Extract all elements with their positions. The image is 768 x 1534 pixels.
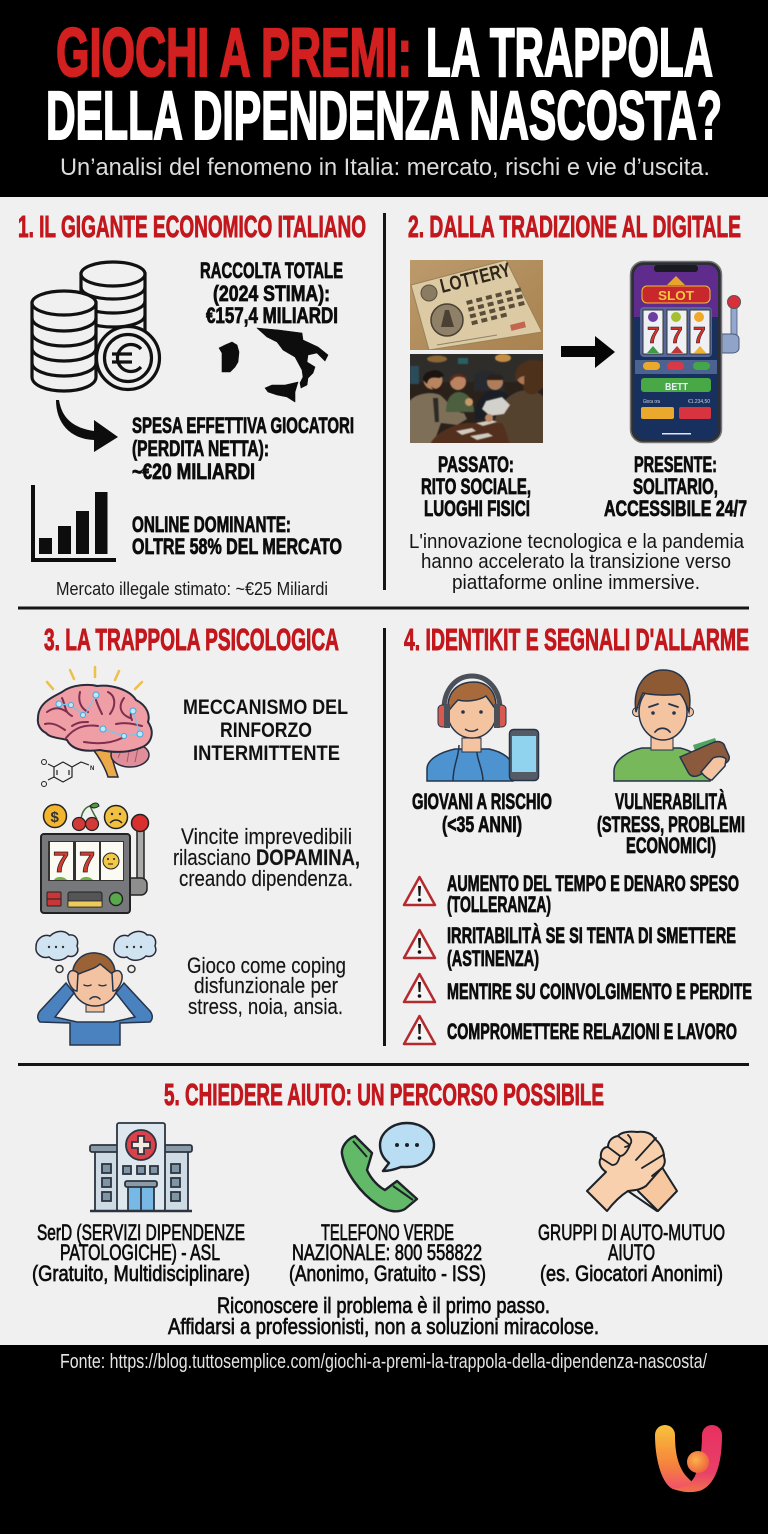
panel 5: chiedere aiuto	[32, 1078, 725, 1339]
paragraph: transition: piattaforme online immersive.	[452, 572, 700, 594]
icon: smartphone slot app	[630, 262, 740, 442]
raccolta totale text: (2024 STIMA):	[213, 281, 330, 306]
online dominante text: OLTRE 58% DEL MERCATO	[132, 534, 342, 559]
service text: telefono verde: (Anonimo, Gratuito - ISS)	[289, 1261, 486, 1286]
icon: young man with headphones and phone	[427, 676, 538, 781]
service text: telefono verde	[289, 1220, 486, 1286]
presente label: SOLITARIO,	[633, 474, 718, 499]
service text: telefono verde: TELEFONO VERDE	[321, 1220, 454, 1245]
spesa effettiva text: ~€20 MILIARDI	[132, 459, 255, 484]
icon: brain with dopamine molecule	[38, 667, 152, 786]
spesa effettiva text	[132, 413, 354, 484]
paragraph: transition: hanno accelerato la transizione verso	[421, 551, 731, 573]
service text: gruppi di auto-mutuo aiuto	[538, 1220, 725, 1286]
paragraph: transition: L'innovazione tecnologica e la pandemia	[409, 531, 745, 553]
presente label: PRESENTE:	[634, 452, 717, 477]
service text: gruppi di auto-mutuo aiuto: (es. Giocatori Anonimi)	[540, 1261, 723, 1286]
panel 4: identikit e segnali d'allarme	[404, 623, 752, 1044]
warning 1	[404, 871, 739, 917]
icon: smartphone slot app: Gioca ora	[643, 399, 660, 405]
icon: slot machine: $	[50, 809, 60, 826]
icon: smartphone slot app: €1.234,50	[688, 399, 710, 405]
profile labels	[412, 789, 745, 858]
online dominante text: ONLINE DOMINANTE:	[132, 512, 291, 537]
icon: smartphone slot app: 7	[670, 322, 683, 348]
subtitle: Un’analisi del fenomeno in Italia: mercato, rischi e vie d’uscita.	[60, 154, 710, 181]
spesa effettiva text: (PERDITA NETTA):	[132, 436, 269, 461]
closing message: Riconoscere il problema è il primo passo.	[217, 1293, 550, 1318]
mechanism text	[183, 695, 348, 765]
arrow: past to present	[561, 336, 615, 368]
online dominante text	[132, 512, 342, 559]
coping text: stress, noia, ansia.	[188, 994, 343, 1019]
logo	[655, 1425, 722, 1492]
coping text: Gioco come coping	[187, 953, 346, 978]
profile labels: (<35 ANNI)	[442, 812, 522, 837]
icon: smartphone slot app: 7	[647, 322, 660, 348]
panel 3: la trappola psicologica	[36, 623, 360, 1045]
paragraph: transition	[409, 531, 745, 594]
passato label	[421, 452, 531, 521]
warning signs list	[404, 871, 752, 1044]
service text: SerD: PATOLOGICHE) - ASL	[60, 1240, 220, 1265]
icon: hospital	[90, 1123, 192, 1211]
dopamine text: rilasciano DOPAMINA,	[173, 845, 360, 870]
raccolta totale text	[200, 258, 343, 328]
spesa effettiva text: SPESA EFFETTIVA GIOCATORI	[132, 413, 354, 438]
heading 3: 3. LA TRAPPOLA PSICOLOGICA	[44, 623, 339, 657]
icon: stressed person	[36, 931, 156, 1045]
passato label: PASSATO:	[438, 452, 514, 477]
dopamine text: creando dipendenza.	[179, 866, 353, 891]
coping text	[187, 953, 346, 1019]
icon: brain with dopamine molecule: N	[90, 766, 94, 772]
arrow: curved to net spending	[56, 400, 118, 452]
image: lottery ticket: LOTTERY	[438, 259, 514, 298]
presente label	[604, 452, 747, 521]
icon: slot machine	[41, 803, 148, 913]
service text: telefono verde: NAZIONALE: 800 558822	[292, 1240, 482, 1265]
icon: phone with speech bubble	[342, 1123, 434, 1211]
icon: smartphone slot app: SLOT	[658, 288, 694, 303]
icon: bar chart	[31, 485, 116, 562]
icon: smartphone slot app: BETT	[665, 382, 688, 393]
warning 1: (TOLLERANZA)	[447, 892, 551, 917]
passato label: RITO SOCIALE,	[421, 474, 531, 499]
service text: SerD: (Gratuito, Multidisciplinare)	[32, 1261, 250, 1286]
profile labels: GIOVANI A RISCHIO	[412, 789, 552, 814]
icon: coin stacks with euro	[32, 262, 160, 391]
image: lottery ticket	[410, 259, 543, 350]
illegal market note: Mercato illegale stimato: ~€25 Miliardi	[56, 579, 328, 599]
service text: SerD: SerD (SERVIZI DIPENDENZE	[37, 1220, 245, 1245]
panel 1: il gigante economico italiano	[18, 210, 366, 599]
warning 2	[404, 923, 736, 971]
icon: clasped hands	[587, 1132, 677, 1211]
icon: slot machine: 7	[79, 847, 95, 879]
dopamine text	[173, 824, 360, 891]
icon: map of southern Italy	[219, 328, 328, 402]
heading 1: 1. IL GIGANTE ECONOMICO ITALIANO	[18, 210, 366, 244]
closing message: Affidarsi a professionisti, non a soluzioni miracolose.	[168, 1314, 599, 1339]
warning 2: (ASTINENZA)	[447, 946, 539, 971]
coping text: disfunzionale per	[194, 973, 338, 998]
mechanism text: RINFORZO	[220, 718, 312, 742]
mechanism text: INTERMITTENTE	[193, 741, 340, 765]
panel 2: dalla tradizione al digitale	[408, 210, 747, 594]
dopamine text: Vincite imprevedibili	[181, 824, 352, 849]
title line 1, red part: GIOCHI A PREMI:	[56, 14, 412, 91]
raccolta totale text: €157,4 MILIARDI	[206, 303, 338, 328]
mechanism text: MECCANISMO DEL	[183, 695, 348, 719]
service text: gruppi di auto-mutuo aiuto: AIUTO	[608, 1240, 655, 1265]
icon: slot machine: 7	[53, 847, 69, 879]
raccolta totale text: RACCOLTA TOTALE	[200, 258, 343, 283]
service text: SerD	[32, 1220, 250, 1286]
icon: smartphone slot app: 7	[693, 322, 706, 348]
icon: worried man with wallet	[614, 670, 729, 781]
profile labels: ECONOMICI)	[626, 833, 716, 858]
image: people playing cards	[408, 352, 545, 445]
passato label: LUOGHI FISICI	[424, 496, 530, 521]
header: title and subtitle	[46, 14, 722, 181]
closing message	[168, 1293, 599, 1339]
footer: source and logo	[60, 1351, 722, 1492]
